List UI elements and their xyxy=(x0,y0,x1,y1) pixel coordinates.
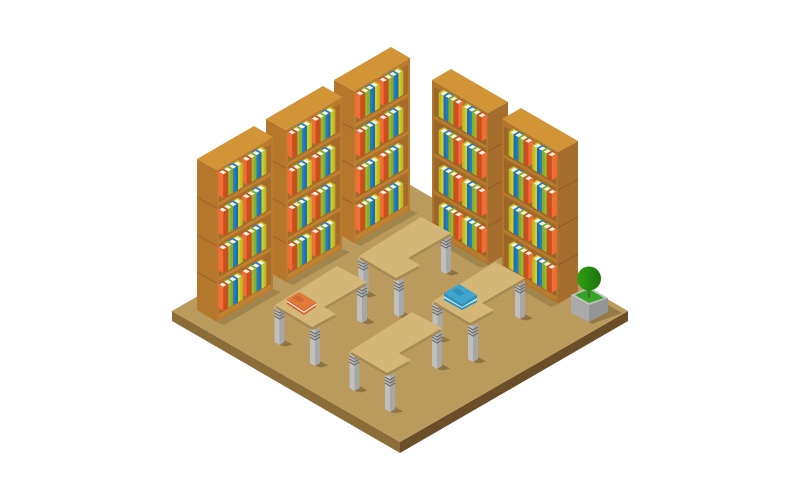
desk: back xyxy=(358,217,459,318)
plant in pot xyxy=(571,266,622,324)
bookcase: back left xyxy=(334,47,418,246)
floor platform xyxy=(172,179,628,453)
bookcase: front right xyxy=(494,108,578,307)
bookcase: back right xyxy=(424,69,508,268)
bookcase: middle left xyxy=(266,86,350,285)
desk: left with orange book xyxy=(274,266,375,368)
icon: orange book stack xyxy=(287,292,316,315)
icon: blue book stack xyxy=(444,284,477,310)
desk: right with blue book xyxy=(432,262,533,364)
bookcase: front left xyxy=(197,126,281,325)
desk: front xyxy=(350,312,450,414)
